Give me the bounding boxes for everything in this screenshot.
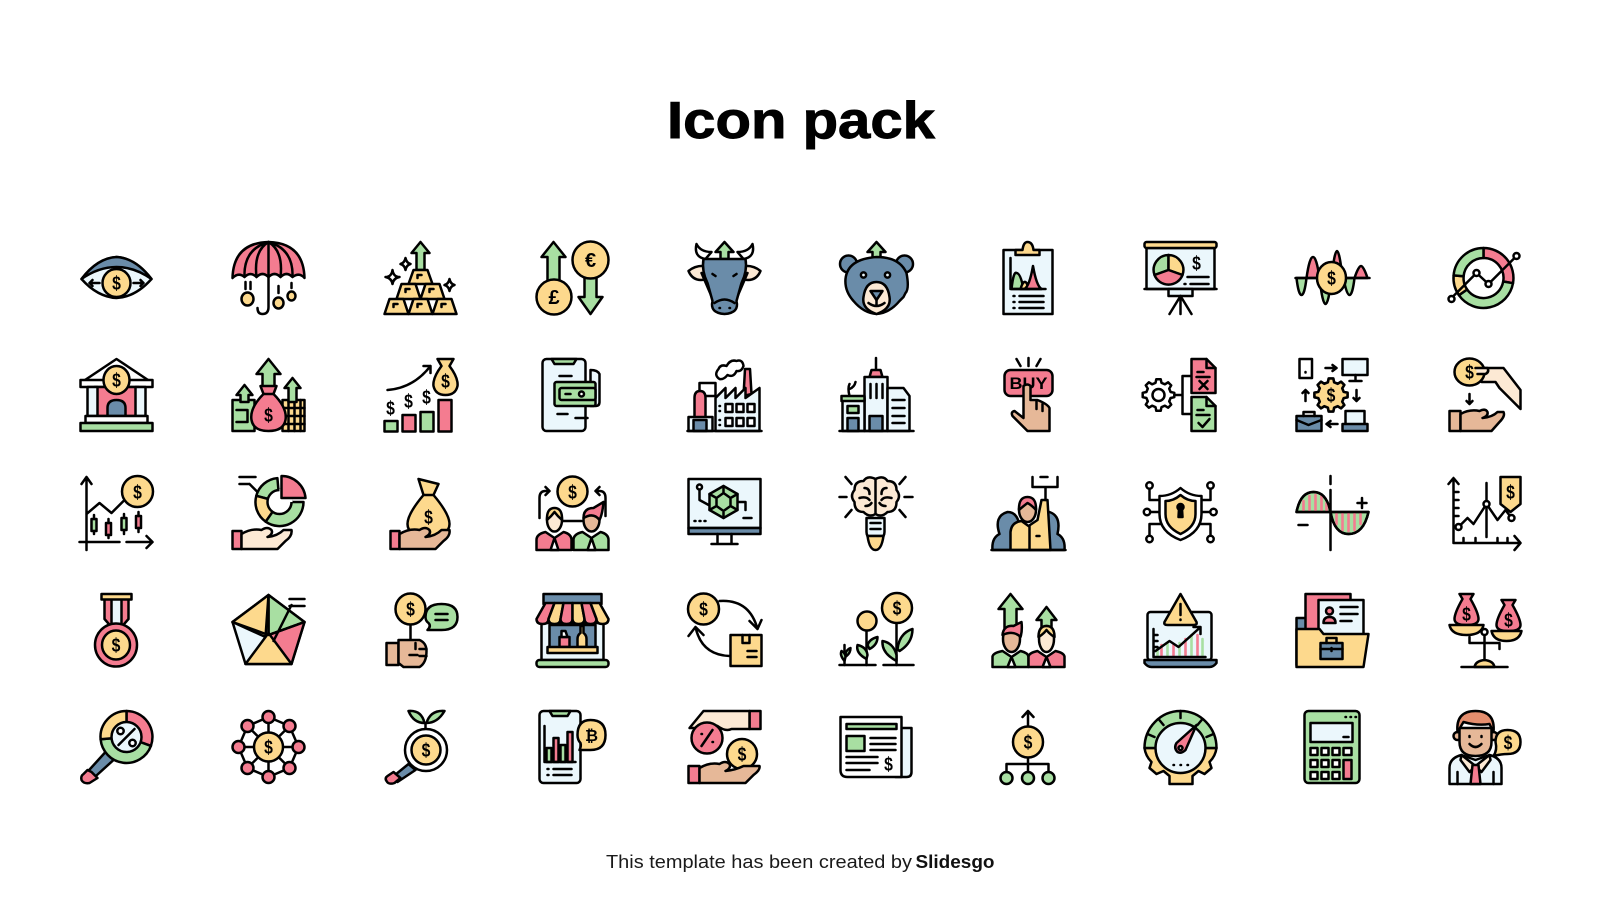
icon: growing coin plants [840, 593, 914, 665]
icon: presentation board [1144, 242, 1216, 314]
icon: coin passing between hands [1450, 358, 1520, 431]
icon: donut chart with line [1448, 248, 1520, 308]
icon: money bag on hand: $ [424, 506, 433, 528]
icon: two people with coin: $ [568, 481, 577, 503]
icon: money bag with arrows: $ [264, 404, 273, 426]
icon: medal [95, 594, 137, 666]
icon: line chart with price tag [1448, 477, 1520, 550]
icon: newspaper: $ [884, 753, 893, 775]
icon: gold bars pyramid [384, 242, 456, 314]
icon: folder with profile document [1296, 594, 1368, 667]
icon: phone with bitcoin bubble [540, 711, 606, 783]
icon: speedometer gear [1144, 711, 1216, 784]
icon: hands exchanging coins: $ [738, 743, 747, 765]
icon: brain light bulb [840, 477, 912, 550]
icon: rising bars with bag: $ [441, 370, 450, 392]
icon: sine wave plus minus [1296, 476, 1368, 550]
icon: waves with coin [1296, 251, 1370, 304]
icon: medal: $ [112, 634, 121, 656]
icon: coin passing between hands: $ [1465, 361, 1474, 383]
icon: devices workflow with gear [1296, 359, 1368, 431]
icon: phone with bitcoin bubble: ₿ [585, 727, 598, 745]
icon: businessman with coin: $ [1504, 731, 1513, 753]
icon: pound and euro exchange: £ [548, 287, 560, 309]
icon: person raising flag [992, 477, 1066, 550]
icon: laptop with warning [1144, 594, 1216, 667]
icon: bank building: $ [112, 369, 121, 391]
icon: two people with rising arrows [992, 594, 1064, 667]
icon: bull head [688, 242, 760, 314]
icon: balance scale with money bags [1450, 594, 1522, 667]
icon: eye with coin [82, 257, 152, 298]
footer credit: Slidesgo [916, 852, 995, 872]
icon: growing coin plants: $ [893, 597, 902, 619]
icon: newspaper [840, 717, 912, 777]
icon: magnifier with sprout: $ [422, 739, 431, 761]
icon: donut chart on hand [232, 476, 306, 549]
icon: pentagon radar chart [232, 595, 304, 664]
icon: network around coin: $ [264, 736, 273, 758]
icon: waves with coin: $ [1327, 267, 1336, 289]
icon: balance scale with money bags: $ [1504, 609, 1513, 631]
icon: candlestick chart with coin: $ [133, 481, 142, 503]
icon: umbrella with coins [232, 242, 304, 314]
icon: businessman with coin [1450, 711, 1520, 784]
icon: security shield [1144, 482, 1217, 542]
icon: pound and euro exchange: € [585, 250, 596, 272]
icon: pound and euro exchange [536, 242, 608, 314]
icon: devices workflow with gear: $ [1327, 384, 1336, 406]
icon: coin tree with nodes: $ [1024, 731, 1033, 753]
icon: fist holding coin with speech bubble [386, 594, 458, 667]
icon: network around coin [232, 711, 304, 783]
icon: coin tree with nodes [1000, 711, 1054, 784]
icon: money bag with arrows [232, 359, 304, 431]
icon: hands exchanging coins [688, 711, 760, 783]
icon: candlestick chart with coin [80, 476, 153, 550]
icon: market store [536, 594, 608, 667]
icon: clipboard report [1004, 242, 1052, 314]
icon: bank building [80, 359, 152, 431]
icon: bear head [840, 242, 913, 314]
icon: magnifier with percent [81, 711, 152, 783]
icon: rising bars with bag [384, 359, 458, 432]
icon: rising bars with bag: $ [404, 390, 413, 412]
icon: city buildings [840, 358, 914, 431]
icon: coin and parcel exchange [688, 594, 762, 666]
icon: coin and parcel exchange: $ [699, 598, 708, 620]
icon: fist holding coin with speech bubble: $ [406, 598, 415, 620]
icon: factory [688, 361, 762, 431]
icon: gear with documents [1143, 359, 1216, 431]
icon: rising bars with bag: $ [422, 386, 431, 408]
icon: monitor with gem [688, 479, 760, 544]
icon: calculator [1304, 711, 1360, 783]
icon: two people with coin [536, 476, 608, 550]
footer credit: This template has been created by [606, 852, 912, 872]
title: Icon pack [667, 92, 935, 150]
icon: balance scale with money bags: $ [1462, 603, 1471, 625]
icon: line chart with price tag: $ [1506, 481, 1515, 503]
icon: phone with wallet [542, 359, 600, 431]
icon: presentation board: $ [1192, 252, 1201, 274]
icon: buy button with hand [1004, 358, 1052, 431]
icon: magnifier with sprout [386, 711, 447, 784]
icon: eye with coin: $ [112, 272, 121, 294]
icon: buy button with hand: BUY [1010, 374, 1048, 393]
icon: rising bars with bag: $ [386, 397, 395, 419]
icon: money bag on hand [390, 479, 450, 549]
